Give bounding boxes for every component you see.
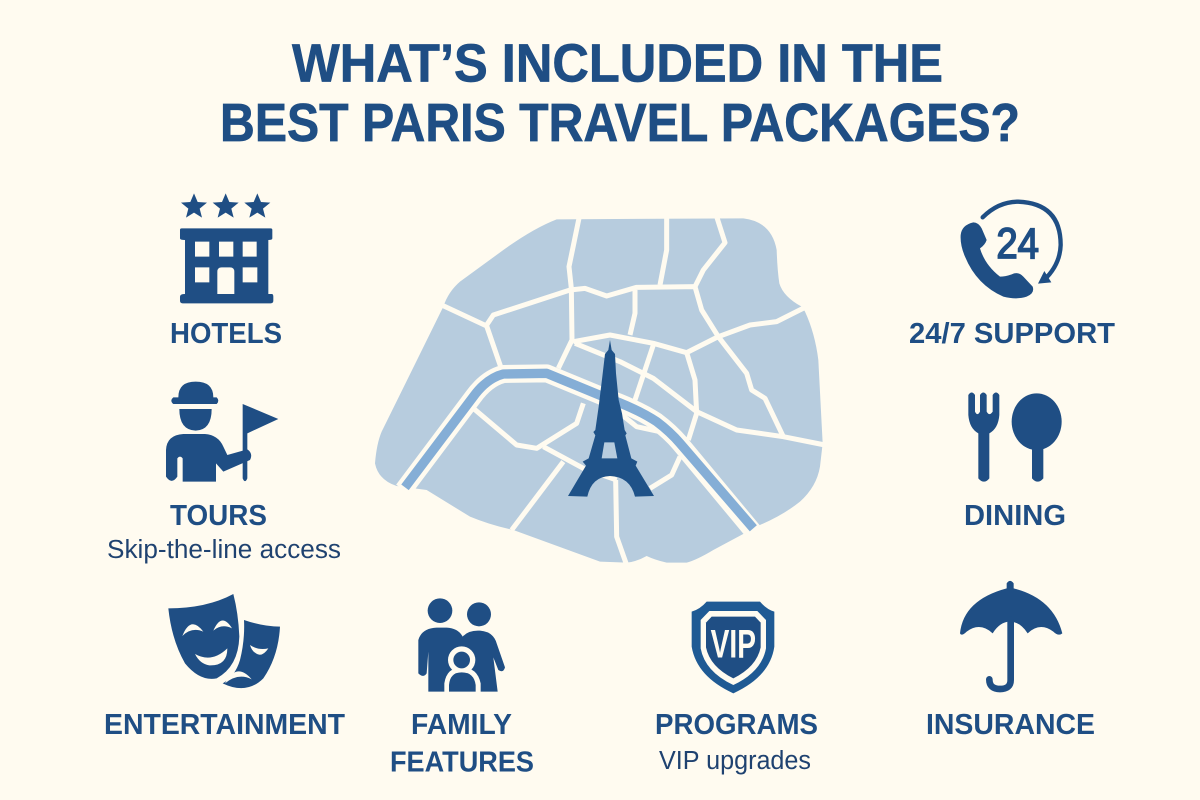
programs item: PROGRAMS bbox=[655, 709, 818, 741]
river Seine bbox=[403, 373, 753, 532]
dining item: DINING bbox=[964, 500, 1066, 532]
entertainment item bbox=[104, 594, 345, 741]
tours item: TOURS bbox=[170, 500, 267, 532]
family features item bbox=[390, 598, 534, 778]
support item bbox=[909, 202, 1115, 350]
icon: phone with 24 hour arrow: 24 bbox=[996, 220, 1039, 268]
title: BEST PARIS TRAVEL PACKAGES? bbox=[220, 94, 1020, 153]
title bbox=[220, 34, 1020, 153]
family features item: FAMILY bbox=[411, 709, 512, 741]
title: WHAT’S INCLUDED IN THE bbox=[292, 34, 943, 94]
entertainment item: ENTERTAINMENT bbox=[104, 709, 345, 741]
hotels item: HOTELS bbox=[170, 318, 282, 350]
hotels item bbox=[170, 193, 282, 350]
tours item bbox=[107, 382, 341, 564]
icon: phone with 24 hour arrow bbox=[961, 202, 1061, 298]
insurance item bbox=[926, 581, 1095, 741]
icon: theatre masks bbox=[168, 594, 280, 688]
icon: umbrella bbox=[960, 581, 1062, 689]
icon: family bbox=[418, 598, 505, 692]
icon: Eiffel Tower bbox=[568, 340, 654, 497]
map of Paris with Eiffel Tower bbox=[375, 217, 825, 565]
icon: hotel with three stars bbox=[180, 193, 273, 303]
programs item bbox=[655, 602, 818, 775]
icon: VIP shield bbox=[692, 602, 774, 693]
dining item bbox=[964, 392, 1066, 532]
family features item: FEATURES bbox=[390, 746, 534, 778]
tours item: Skip-the-line access bbox=[107, 536, 341, 564]
icon: tour guide with flag bbox=[166, 382, 278, 482]
icon: VIP shield: VIP bbox=[711, 622, 756, 666]
programs item: VIP upgrades bbox=[659, 747, 811, 775]
insurance item: INSURANCE bbox=[926, 709, 1095, 741]
icon: fork and spoon bbox=[968, 392, 1062, 482]
support item: 24/7 SUPPORT bbox=[909, 318, 1115, 350]
